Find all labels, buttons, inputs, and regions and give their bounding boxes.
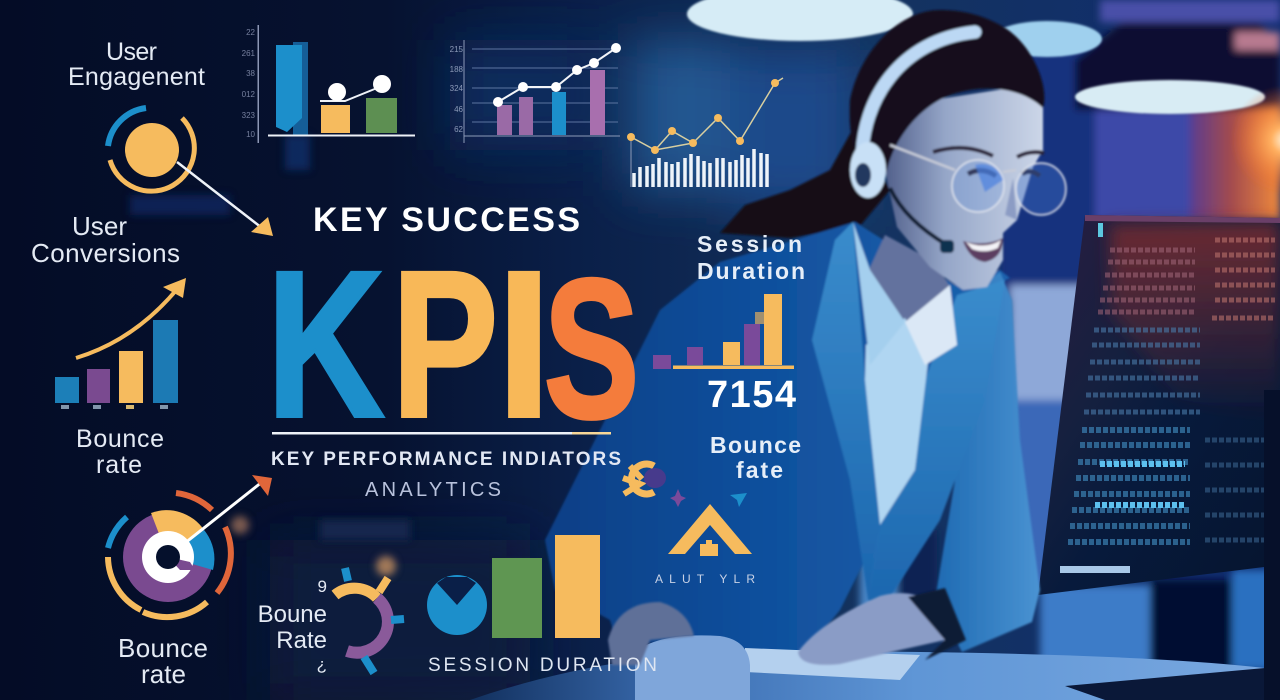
axis numbers: 324	[450, 84, 464, 93]
title: KPIS: P	[392, 229, 498, 461]
neck	[868, 235, 950, 322]
chart: bars with rising line	[450, 40, 621, 143]
nose shade	[1005, 178, 1017, 220]
label: user engagement: Engagenent	[68, 63, 205, 91]
label: bounce rate 1	[76, 425, 164, 479]
face	[880, 87, 1043, 290]
label: boune rate: ¿	[317, 655, 327, 674]
left collar	[853, 222, 905, 365]
axis numbers: 215	[450, 45, 464, 54]
axis numbers	[450, 45, 464, 134]
subtitle: KEY PERFORMANCE INDIATORS	[271, 449, 621, 470]
brows	[933, 148, 1044, 157]
laptop	[1065, 668, 1272, 700]
label: user conversions: User	[72, 211, 127, 241]
chart: line over histogram	[627, 78, 783, 187]
chart: small bar with dots	[242, 25, 415, 143]
torso	[545, 222, 1010, 660]
title: KPIS: S	[544, 238, 639, 459]
chart: large green and yellow bars	[492, 535, 600, 638]
icon: half ring with ticks	[335, 568, 404, 673]
keyboard	[745, 648, 920, 680]
eyes	[968, 170, 1040, 176]
arrow: engagement to title	[177, 162, 273, 236]
axis numbers: 261	[242, 49, 256, 58]
headset band	[862, 32, 975, 160]
left hand	[608, 602, 694, 665]
axis numbers: 22	[246, 28, 256, 37]
label: boune rate: Boune	[258, 601, 327, 628]
label: boune rate: Rate	[276, 627, 327, 654]
ceiling lamps	[687, 0, 1280, 195]
subtitle: analytics: ANALYTICS	[365, 479, 501, 501]
right jacket front	[868, 280, 1005, 610]
right sleeve	[935, 272, 1040, 652]
ponytail	[720, 125, 890, 238]
label: user engagement	[68, 38, 205, 91]
title: KPIS	[267, 229, 639, 461]
mug	[635, 635, 750, 700]
mouth	[963, 238, 1003, 262]
title underline	[272, 432, 611, 434]
left lapel	[812, 222, 880, 600]
hands	[608, 588, 966, 665]
title: KPIS: K	[267, 229, 384, 461]
right collar	[905, 285, 957, 365]
label: session duration	[697, 231, 805, 284]
label: user conversions	[31, 211, 180, 268]
headset earcup	[850, 142, 886, 198]
label: bounce rate 2: Bounce	[118, 633, 208, 663]
axis numbers: 10	[246, 130, 256, 139]
icon: purple sparkle	[670, 489, 686, 507]
axis numbers	[242, 28, 256, 139]
desk	[470, 390, 1280, 700]
title: key success: KEY SUCCESS	[313, 201, 580, 239]
monitor	[1038, 215, 1280, 595]
label: alut ylr: ALUT YLR	[655, 572, 755, 586]
axis numbers: 012	[242, 90, 256, 99]
metric: 7154: 7154	[707, 374, 796, 416]
label: user conversions: Conversions	[31, 238, 180, 268]
title: KPIS: I	[497, 229, 551, 461]
axis numbers: 46	[454, 105, 464, 114]
label: bounce rate 1: Bounce	[76, 425, 164, 453]
icon: conversions bar chart	[55, 278, 186, 409]
hair	[850, 10, 1044, 185]
woman at desk	[545, 10, 1066, 660]
label: bounce rate 2	[118, 633, 208, 689]
axis numbers: 38	[246, 69, 256, 78]
shirt body	[865, 318, 928, 525]
monitor stand edge	[1264, 390, 1280, 700]
label: bounce fate: fate	[736, 457, 783, 483]
watch	[908, 588, 966, 660]
icon: yellow knot	[623, 464, 666, 494]
icon: house	[668, 504, 752, 556]
axis numbers: 62	[454, 125, 464, 134]
arrow: donut to title	[180, 475, 272, 547]
microphone boom	[890, 188, 947, 245]
label: bounce rate 1: rate	[96, 451, 142, 479]
label: session duration: Session	[697, 231, 802, 257]
axis numbers: 188	[450, 65, 464, 74]
right hand	[798, 593, 945, 665]
background: curtains and right wall	[860, 0, 1280, 675]
monitor data	[1068, 240, 1275, 542]
label: boune rate	[258, 577, 327, 674]
icon: engagement ring	[108, 108, 194, 191]
label: boune rate: 9	[318, 577, 327, 596]
chart: session duration bars	[653, 294, 794, 369]
glasses	[890, 145, 1066, 215]
label: bounce fate: Bounce	[710, 432, 801, 458]
axis numbers: 323	[242, 111, 256, 120]
icon: blue pie	[427, 575, 487, 635]
icon: segmented donut	[108, 493, 231, 617]
label: session duration: Duration	[697, 258, 805, 284]
label: session duration bottom: SESSION DURATION	[428, 655, 657, 676]
label: bounce rate 2: rate	[141, 659, 186, 689]
label: bounce fate	[710, 432, 801, 483]
icon: blue sparkle	[730, 493, 747, 507]
label: user engagement: User	[106, 38, 157, 66]
